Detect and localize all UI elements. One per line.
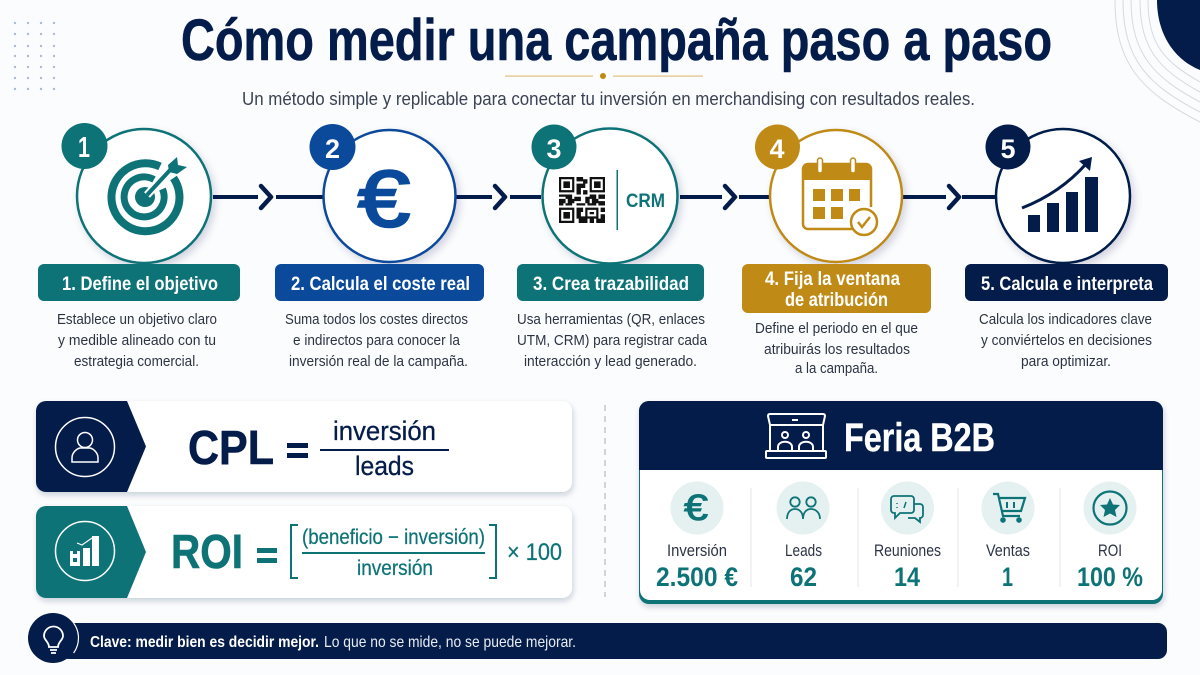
- icon: booth: [766, 414, 826, 458]
- connector arrows: [213, 186, 996, 208]
- step 5 description: para optimizar.: [1021, 353, 1111, 370]
- CPL arrow tab: [36, 401, 146, 492]
- step 4 description: a la campaña.: [795, 360, 878, 377]
- step 3 description: interacción y lead generado.: [524, 353, 697, 370]
- CPL equation: leads: [355, 451, 414, 481]
- metric: inversión: [656, 482, 738, 592]
- step 4 badge: [755, 124, 800, 170]
- ROI equation: × 100: [507, 539, 562, 566]
- step 2 label: [275, 264, 484, 301]
- step 4 description: atribuirás los resultados: [764, 341, 910, 358]
- step 2 circle: [324, 130, 456, 262]
- panel: Feria B2B: [639, 401, 1163, 604]
- step 3 circle: [542, 128, 678, 264]
- ROI equation: inversión: [357, 557, 433, 580]
- step 5: [965, 124, 1168, 370]
- ROI equation: [171, 525, 562, 580]
- step 1 circle: [77, 129, 211, 263]
- decorative dot grid: [14, 22, 55, 90]
- step 3 label: 3. Crea trazabilidad: [533, 274, 689, 295]
- step 5 description: Calcula los indicadores clave: [979, 311, 1152, 328]
- ROI equation: ROI: [171, 526, 243, 579]
- step 4 circle: [770, 130, 902, 262]
- CPL equation: CPL: [188, 422, 274, 475]
- ROI equation: (beneficio − inversión): [302, 526, 485, 549]
- step 1 description: estrategia comercial.: [74, 353, 199, 370]
- icon: CRM: CRM: [626, 191, 665, 212]
- metric: leads: Leads: [785, 541, 822, 560]
- step 3 badge: [532, 124, 576, 170]
- step 4 badge: 4: [770, 134, 784, 164]
- metric: reuniones: [874, 482, 941, 592]
- step 2 description: Suma todos los costes directos: [285, 311, 468, 328]
- CPL equation: inversión: [333, 416, 436, 446]
- icon: growth chart: [1022, 157, 1098, 232]
- step 2 label: 2. Calcula el coste real: [291, 274, 470, 295]
- metric: ROI: [1077, 482, 1143, 592]
- icon: light bulb: [28, 613, 78, 663]
- icon: calendar: [803, 158, 877, 235]
- step 3 description: [517, 311, 708, 370]
- step 2: [275, 124, 484, 370]
- metric: ventas: 1: [1002, 562, 1013, 592]
- step 4: [742, 124, 931, 377]
- subtitle: Un método simple y replicable para conectar tu inversión en merchandising con resultados reales.: [242, 88, 975, 109]
- icon: target: [111, 157, 187, 231]
- step 1 badge: 1: [78, 132, 90, 164]
- step 5 circle: [996, 129, 1130, 263]
- step 2 description: e indirectos para conocer la: [293, 332, 461, 349]
- step 3 label: [517, 264, 704, 301]
- step 3 description: Usa herramientas (QR, enlaces: [517, 311, 705, 328]
- step 4 label: [742, 264, 931, 313]
- metric: inversión: Inversión: [667, 541, 727, 560]
- step 4 description: Define el periodo en el que: [755, 320, 918, 337]
- metric: leads: [776, 482, 830, 592]
- step 5 badge: 5: [1000, 134, 1016, 164]
- step 5 label: 5. Calcula e interpreta: [981, 274, 1153, 295]
- metric: ventas: Ventas: [986, 541, 1030, 560]
- step 3 badge: 3: [546, 134, 562, 164]
- icon: QR code: [559, 177, 605, 223]
- step 1 badge: [62, 123, 108, 169]
- step 5 label: [965, 264, 1168, 301]
- step 5 description: y conviértelos en decisiones: [981, 332, 1152, 349]
- key takeaway banner: Lo que no se mide, no se puede mejorar.: [324, 634, 576, 651]
- step 5 description: [979, 311, 1152, 370]
- column dividers: [751, 488, 1060, 587]
- panel heading: Feria B2B: [844, 416, 995, 460]
- panel: ROI formula: [36, 506, 572, 598]
- step 5 badge: [986, 124, 1030, 170]
- step 4 label: de atribución: [785, 290, 888, 311]
- step 1 label: [38, 264, 240, 301]
- ROI arrow tab: [36, 506, 146, 598]
- step 2 description: inversión real de la campaña.: [289, 353, 468, 370]
- metric: ventas: [982, 482, 1034, 592]
- step 1 label: 1. Define el objetivo: [62, 274, 218, 295]
- step 2 badge: [310, 124, 356, 170]
- title divider: [505, 73, 703, 79]
- metric: reuniones: 14: [894, 562, 920, 592]
- CPL equation: [188, 416, 449, 481]
- vertical dashed separator: [604, 405, 606, 597]
- step 1 description: [57, 311, 217, 370]
- banner text: Clave: medir bien es decidir mejor.: [90, 634, 319, 651]
- icon: bar chart in circle: [56, 522, 114, 580]
- metric: reuniones: Reuniones: [874, 541, 941, 560]
- step 4 description: [755, 320, 918, 377]
- divider: [616, 170, 618, 230]
- icon: person: [56, 418, 114, 476]
- step 4 label: 4. Fija la ventana: [765, 269, 900, 290]
- step 1: [38, 123, 240, 370]
- step 2 badge: 2: [325, 134, 340, 164]
- step 3 description: UTM, CRM) para registrar cada: [517, 332, 708, 349]
- metric: ROI: 100 %: [1077, 562, 1143, 592]
- metric: ROI: ROI: [1098, 541, 1122, 560]
- step 2 description: [285, 311, 468, 370]
- step 1 description: y medible alineado con tu: [58, 332, 216, 349]
- step 3: [517, 124, 708, 370]
- metric: leads: 62: [790, 562, 817, 592]
- decorative corner shape: [1115, 0, 1200, 122]
- metric: inversión: 2.500 €: [656, 562, 738, 592]
- step 1 description: Establece un objetivo claro: [57, 311, 217, 328]
- panel: CPL formula: [36, 401, 572, 492]
- metric: inversión: €: [684, 487, 708, 528]
- icon: euro: €: [358, 154, 410, 243]
- key takeaway banner: [28, 613, 1167, 663]
